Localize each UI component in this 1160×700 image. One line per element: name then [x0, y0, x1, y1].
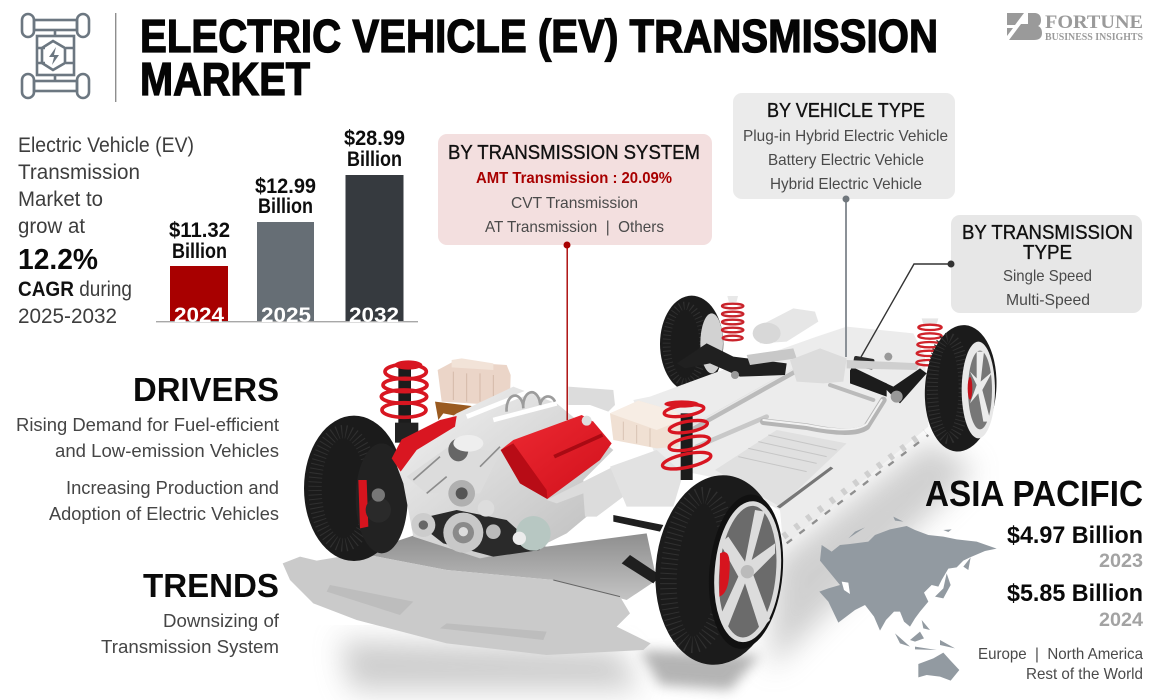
regional stats — [925, 473, 1143, 683]
drivers — [16, 371, 279, 524]
regional stats: $5.85 Billion — [1007, 580, 1143, 607]
skid plate — [283, 553, 651, 655]
steering arm — [613, 515, 663, 583]
callout: by transmission system: BY TRANSMISSION SYSTEM — [448, 142, 700, 164]
callout: by transmission system: AMT Transmission : 20.09% — [476, 170, 672, 187]
text block: CAGR statement: Market to — [18, 188, 103, 211]
bar chart: 2032 — [349, 304, 399, 327]
exhaust manifold — [547, 467, 623, 517]
bar chart: Billion — [347, 148, 402, 171]
callout: by vehicle type: Hybrid Electric Vehicle — [770, 176, 922, 193]
callout: by vehicle type: BY VEHICLE TYPE — [767, 100, 925, 122]
rear left spring — [722, 296, 743, 340]
text block: CAGR statement: CAGR during — [18, 278, 132, 301]
trends — [101, 567, 280, 657]
red valve cover right — [501, 415, 612, 499]
regional stats: Europe | North America — [978, 646, 1143, 663]
callout: by transmission type — [951, 215, 1142, 313]
title: ELECTRIC VEHICLE (EV) TRANSMISSION — [140, 10, 938, 62]
text block: CAGR statement: Electric Vehicle (EV) — [18, 134, 194, 157]
bar chart: 2024 — [174, 304, 224, 327]
red valve cover left — [392, 416, 457, 472]
bar chart: $12.99 — [255, 175, 316, 198]
regional stats: 2023 — [1099, 551, 1143, 572]
text block: CAGR statement: 12.2% — [18, 244, 98, 276]
logo: Fortune Business Insights — [1007, 12, 1143, 43]
connector: transmission type — [861, 260, 954, 357]
illustration: front right wheel — [648, 470, 789, 670]
bar chart: $28.99 — [344, 127, 405, 150]
bar chart: $11.32 — [169, 219, 230, 242]
text block: CAGR statement: 2025-2032 — [18, 305, 117, 328]
battery floor — [633, 327, 928, 547]
floor panel — [715, 430, 928, 543]
callout: by vehicle type — [733, 93, 955, 199]
drivers: Rising Demand for Fuel-efficient — [16, 415, 279, 435]
logo: Fortune Business Insights: BUSINESS INSIGHTS — [1045, 32, 1143, 43]
illustration: front of chassis — [283, 358, 712, 655]
pulleys and belt — [411, 480, 551, 557]
trends: Downsizing of — [163, 611, 280, 631]
title — [140, 10, 938, 105]
regional stats: Rest of the World — [1026, 666, 1143, 683]
text block: CAGR statement: Transmission — [18, 161, 140, 184]
silver cover — [568, 387, 615, 412]
front right spring — [661, 400, 712, 480]
drivers: and Low-emission Vehicles — [55, 441, 279, 461]
title: MARKET — [140, 53, 310, 105]
divider — [115, 13, 116, 102]
logo: Fortune Business Insights: FORTUNE — [1045, 12, 1143, 33]
illustration: rear of chassis — [633, 296, 1001, 547]
bar chart — [156, 127, 418, 327]
rear battery box — [435, 358, 511, 420]
callout: by transmission system: CVT Transmission — [511, 195, 638, 212]
callout: by transmission type: TYPE — [1023, 242, 1072, 264]
regional stats: $4.97 Billion — [1007, 522, 1143, 549]
ground shadows — [340, 440, 975, 690]
callout: by transmission type: BY TRANSMISSION — [962, 222, 1133, 244]
rear right spring — [916, 318, 942, 365]
drivers: DRIVERS — [133, 371, 279, 408]
callout: by transmission system — [438, 134, 712, 245]
transmission — [610, 450, 683, 507]
text block: CAGR statement — [18, 134, 194, 328]
rear right wheel — [921, 323, 1001, 454]
regional stats: 2024 — [1099, 610, 1143, 631]
rear axle — [677, 343, 927, 403]
under-engine shade — [360, 533, 657, 600]
connector: transmission system — [564, 242, 570, 420]
bar chart: Billion — [172, 240, 227, 263]
trends: TRENDS — [143, 567, 279, 604]
engine block — [393, 387, 613, 558]
bar chart: 2025 — [261, 304, 311, 327]
callout: by vehicle type: Plug-in Hybrid Electric Vehicle — [743, 128, 948, 145]
map: Asia Pacific — [819, 517, 997, 681]
drivers: Increasing Production and — [66, 478, 279, 498]
drivers: Adoption of Electric Vehicles — [49, 504, 279, 524]
connector: vehicle type — [842, 196, 850, 357]
rear left wheel — [660, 296, 723, 392]
muffler — [753, 308, 818, 344]
front left spring — [381, 360, 427, 443]
front left wheel — [304, 416, 408, 561]
icon: EV chassis — [22, 14, 89, 98]
callout: by transmission system: AT Transmission | Others — [485, 219, 664, 236]
callout: by transmission type: Single Speed — [1003, 268, 1092, 285]
bar chart: Billion — [258, 195, 313, 218]
front battery box — [610, 401, 682, 448]
text block: CAGR statement: grow at — [18, 215, 85, 238]
callout: by vehicle type: Battery Electric Vehicle — [768, 152, 924, 169]
callout: by transmission type: Multi-Speed — [1006, 292, 1090, 309]
drive tubes — [683, 368, 883, 447]
regional stats: ASIA PACIFIC — [925, 473, 1143, 514]
trends: Transmission System — [101, 637, 279, 657]
